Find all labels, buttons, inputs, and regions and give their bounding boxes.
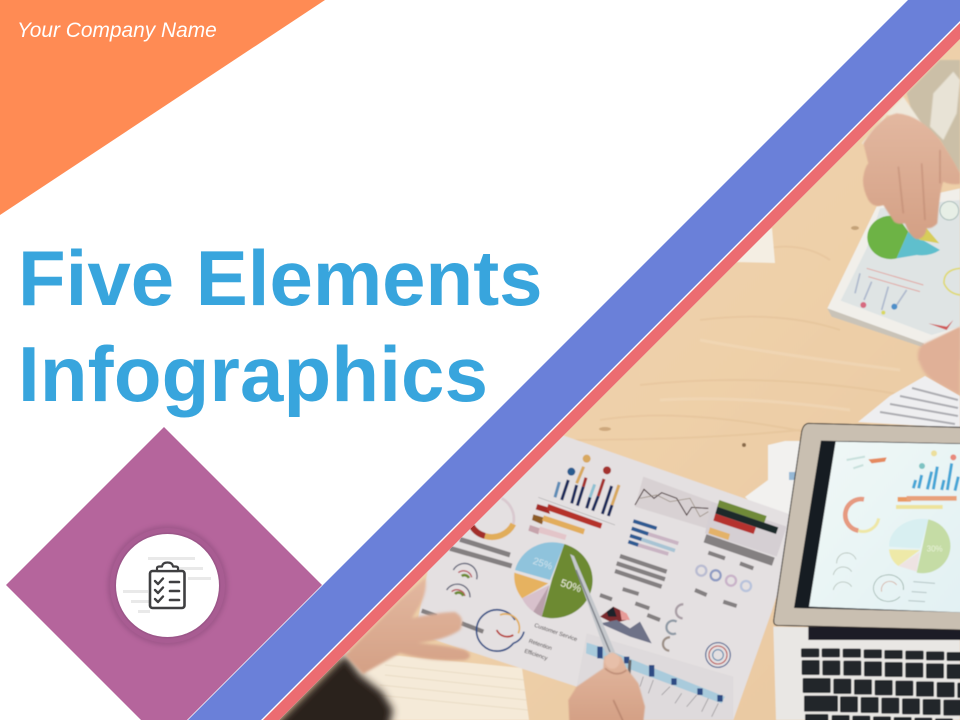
laptop screen charts: 30% bbox=[927, 545, 943, 554]
orange corner panel bbox=[0, 0, 325, 215]
report stacked bars bbox=[628, 521, 678, 554]
top right background: shirt bbox=[862, 60, 960, 173]
report donut chart bbox=[472, 498, 514, 537]
tablet pie chart bbox=[867, 216, 940, 259]
title bbox=[18, 234, 543, 418]
purple diamond panel bbox=[6, 427, 322, 720]
tablet bbox=[827, 188, 960, 360]
title: Infographics bbox=[18, 330, 488, 418]
laptop screen bbox=[794, 441, 960, 612]
left hand holding sheet bbox=[345, 578, 470, 674]
report labels: Efficiency bbox=[523, 649, 548, 662]
report line chart bbox=[635, 477, 712, 528]
report labels: Customer Service bbox=[533, 623, 578, 643]
faint motion lines bbox=[123, 558, 211, 612]
loose printed sheets bbox=[745, 376, 960, 520]
report text blocks bbox=[422, 538, 773, 632]
printed report sheet bbox=[415, 425, 802, 720]
report mountain chart bbox=[600, 607, 652, 643]
report circular diagrams bbox=[447, 563, 751, 667]
photo: desk with charts, tablet and laptop bbox=[270, 30, 960, 720]
band: coral diagonal stripe bbox=[263, 0, 960, 720]
title: Five Elements bbox=[18, 234, 543, 322]
laptop bbox=[773, 423, 960, 720]
laptop base and keyboard bbox=[773, 627, 960, 720]
report histogram bbox=[586, 643, 725, 717]
icon: clipboard bbox=[150, 562, 184, 608]
notebook bbox=[340, 650, 529, 720]
report pie chart: 50% bbox=[559, 577, 583, 595]
pen bbox=[570, 554, 615, 654]
report labels bbox=[523, 623, 578, 662]
laptop lid bbox=[774, 423, 960, 630]
hand over tablet bbox=[863, 113, 960, 360]
small white paper near band bbox=[735, 228, 775, 263]
icon badge: clipboard checklist bbox=[108, 526, 228, 646]
laptop screen charts bbox=[833, 450, 958, 602]
pointing hand bbox=[568, 652, 645, 720]
company name: Your Company Name bbox=[17, 19, 217, 42]
report horizontal bars bbox=[528, 504, 602, 540]
report bar chart bbox=[555, 467, 619, 516]
report heatmap bbox=[705, 500, 787, 557]
report pie chart bbox=[514, 542, 593, 618]
report pie chart: 25% bbox=[531, 556, 554, 573]
hair in foreground bbox=[270, 655, 393, 720]
report labels: Retention bbox=[528, 639, 553, 652]
wooden desk bbox=[270, 30, 960, 720]
right-side hand bbox=[918, 328, 960, 396]
